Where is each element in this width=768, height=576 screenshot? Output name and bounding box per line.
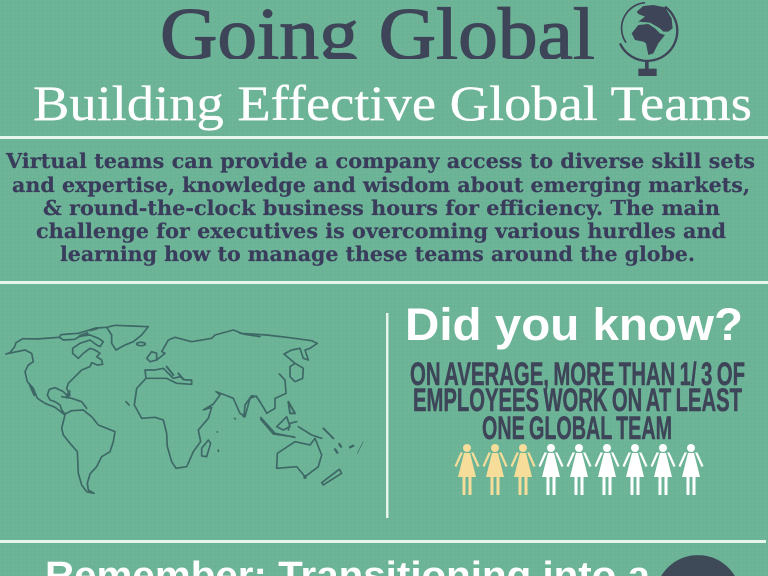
heading: did you know: Did you know? (405, 299, 743, 350)
subtitle: Building Effective Global Teams (33, 75, 752, 131)
intro text block (5, 149, 755, 266)
dark circle (661, 555, 735, 576)
intro text block: learning how to manage these teams around the globe. (60, 242, 695, 266)
intro text block: challenge for executives is overcoming various hurdles and (36, 219, 726, 243)
pictogram: 3 of 9 people (454, 444, 704, 495)
intro text block: Virtual teams can provide a company access to diverse skill sets (5, 149, 755, 173)
world map (6, 325, 363, 493)
icon: globe (620, 3, 677, 76)
statistic text (410, 356, 745, 446)
intro text block: & round-the-clock business hours for efficiency. The main (43, 196, 720, 220)
intro text block: and expertise, knowledge and wisdom about emerging markets, (12, 173, 750, 197)
